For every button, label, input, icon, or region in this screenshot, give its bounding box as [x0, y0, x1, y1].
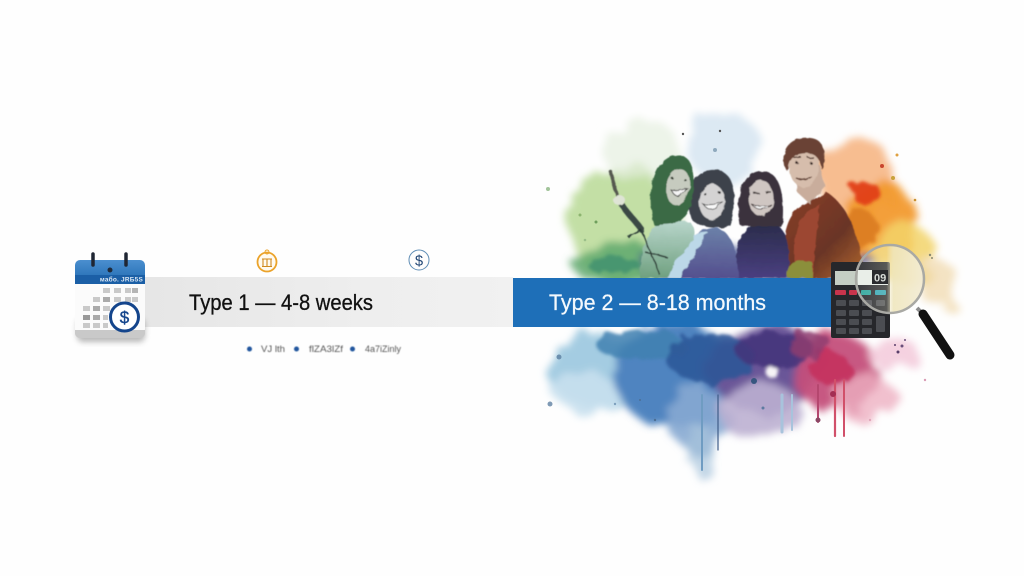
icon: orange badge	[258, 250, 276, 272]
icon: dollar coin	[409, 250, 429, 270]
person: woman in dark top	[735, 171, 789, 278]
watercolor splash background	[546, 112, 960, 476]
paint splatter	[546, 130, 933, 423]
bullet item 1: VJ lth	[261, 344, 285, 354]
timeline bar: Type 2	[513, 278, 832, 327]
icon: magnifying glass	[856, 245, 950, 355]
bullet item 3	[350, 344, 401, 354]
icon: magnifying glass: 09	[874, 272, 886, 284]
bullet item 2	[294, 344, 344, 354]
bullet item 3: 4a7iZinly	[365, 344, 401, 354]
bullet item 1	[247, 344, 285, 354]
paint drips	[702, 380, 844, 470]
microphone stand	[610, 171, 668, 275]
person: woman in blue top	[668, 170, 738, 278]
people group illustration	[610, 138, 864, 278]
icon: calendar with dollar: мабо. JRБ5S	[100, 276, 143, 284]
person: woman in green with microphone	[610, 155, 694, 278]
bullet item 2: flZA3lZf	[309, 344, 344, 354]
timeline bar: Type 1	[145, 277, 513, 327]
icon: dollar coin: $	[415, 254, 423, 270]
label: Type 2 duration: Type 2 — 8-18 months	[549, 290, 766, 315]
label: Type 1 duration: Type 1 — 4-8 weeks	[189, 290, 373, 315]
icon: calendar with dollar	[75, 254, 145, 342]
person: man	[782, 138, 864, 278]
icon: calculator	[831, 262, 890, 338]
icon: dollar badge: $	[120, 308, 130, 327]
bullet list	[247, 344, 401, 354]
